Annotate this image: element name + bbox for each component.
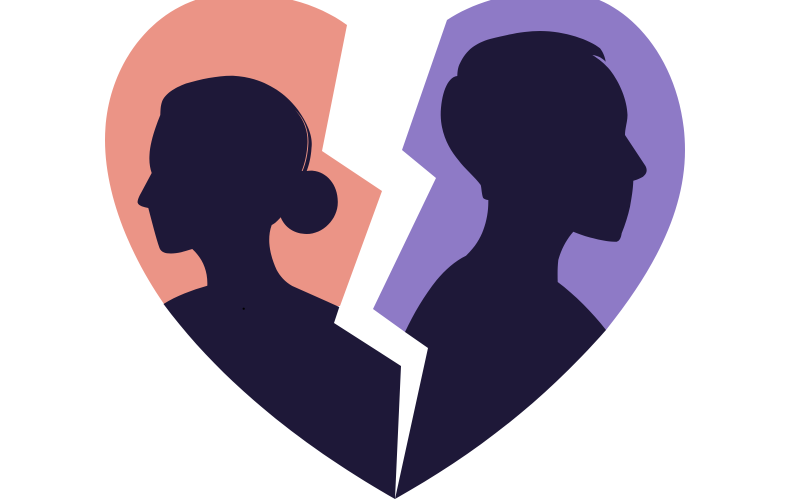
man silhouette <box>395 31 647 499</box>
right heart half <box>373 0 685 332</box>
woman silhouette <box>138 76 401 499</box>
small dot on woman's shoulder <box>243 308 245 310</box>
woman hair highlight <box>295 110 308 171</box>
left heart half <box>105 0 382 306</box>
